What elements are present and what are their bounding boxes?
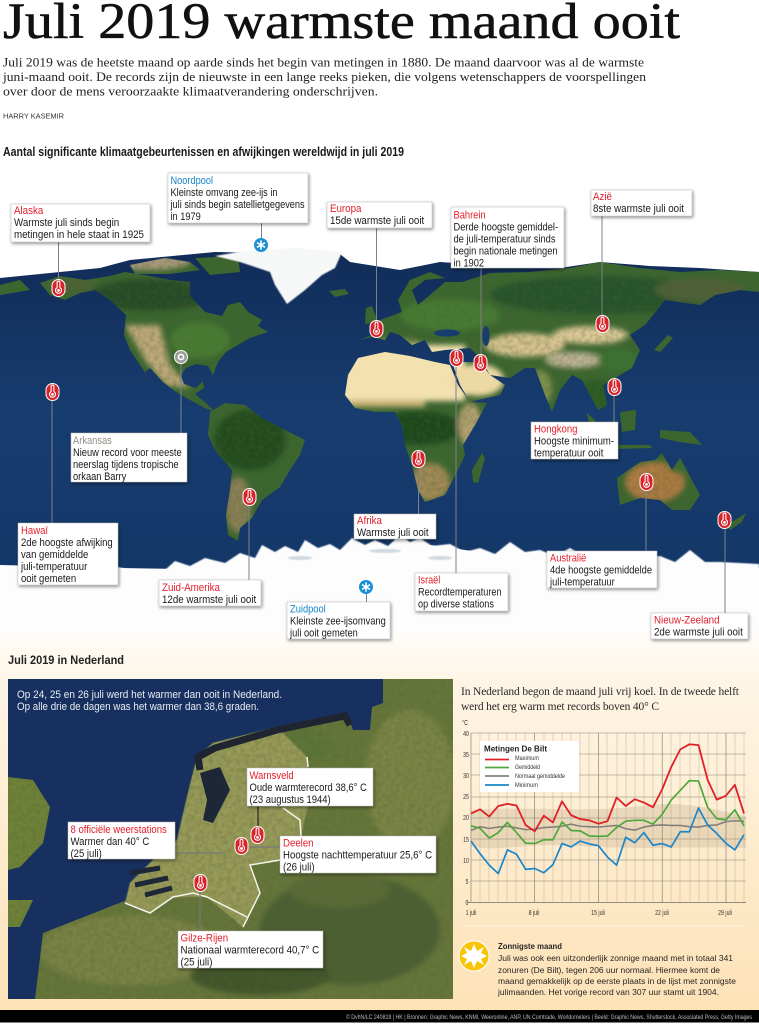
callout: Alaska: Alaska — [14, 206, 44, 217]
map intro text — [17, 689, 282, 713]
callout: Europa: 15de warmste juli ooit — [330, 216, 424, 227]
callout: Warnsveld: Warnsveld — [250, 771, 294, 782]
chart intro text: werd het erg warm met records boven 40° C — [461, 701, 659, 713]
callout: Israël: Recordtemperaturen — [418, 587, 502, 599]
connector lines: grey — [175, 847, 280, 931]
x axis labels: 22 juli — [655, 909, 669, 917]
y axis labels: 30 — [463, 772, 469, 780]
greenland ice — [215, 248, 342, 304]
callout: Gilze-Rijen — [178, 931, 323, 969]
callout: Gilze-Rijen: (25 juli) — [180, 957, 212, 969]
callout: Nieuw-Zeeland — [651, 613, 748, 639]
callout: 8 officiële weerstations: (25 juli) — [70, 849, 102, 860]
callout: Noordpool: Noordpool — [170, 175, 213, 187]
callout: Europa: Europa — [330, 204, 362, 215]
land: England — [8, 777, 50, 927]
callout: Afrika: Afrika — [357, 516, 382, 527]
heading: Nederland: Juli 2019 in Nederland — [8, 655, 124, 667]
callout: Zuidpool — [287, 602, 390, 640]
x axis labels: 8 juli — [529, 909, 539, 917]
map intro text: Op 24, 25 en 26 juli werd het warmer dan ooit in Nederland. — [17, 689, 282, 701]
callout: Hongkong — [531, 422, 618, 460]
callout: Deelen: Hoogste nachttemperatuur 25,6° C — [283, 850, 432, 862]
x axis labels: 1 juli — [466, 909, 476, 917]
y axis labels: 5 — [466, 878, 469, 886]
callout: 8 officiële weerstations: Warmer dan 40° C — [70, 837, 149, 848]
callout: Warnsveld: (23 augustus 1944) — [250, 795, 331, 806]
y axis labels: 35 — [463, 751, 469, 759]
callout: Israël: op diverse stations — [418, 599, 494, 611]
intro text — [2, 54, 647, 98]
callout: Azië — [591, 190, 692, 216]
callout: Australië — [547, 551, 657, 589]
callout: Nieuw-Zeeland: 2de warmste juli ooit — [654, 627, 743, 639]
y axis labels: 10 — [463, 857, 469, 865]
callout: Warnsveld — [247, 768, 373, 806]
callout: Afrika: Warmste juli ooit — [357, 528, 429, 539]
callout: Noordpool — [168, 173, 308, 223]
callout: Hongkong: Hongkong — [534, 424, 577, 436]
heading: world map: Aantal significante klimaatgebeurtenissen en afwijkingen wereldwijd in juli 2019 — [3, 145, 404, 159]
callout: Zuid-Amerika: Zuid-Amerika — [162, 583, 220, 594]
callout: Hawaï: ooit gemeten — [21, 574, 76, 585]
icon: snowflake Noordpool — [254, 238, 268, 252]
markers: Nederland — [194, 826, 264, 892]
chart legend: Minimum — [515, 782, 538, 789]
callout: Deelen: Deelen — [283, 838, 314, 850]
callout: Israël — [415, 573, 508, 611]
chart intro text: In Nederland begon de maand juli vrij koel. In de tweede helft — [461, 686, 740, 698]
intro text: juni-maand ooit. De records zijn de nieuwste in een lange reeks pieken, die volgens wetenschappers de voorspellingen — [2, 69, 647, 84]
chart legend: Normaal gemiddelde — [515, 773, 565, 780]
map intro text: Op alle drie de dagen was het warmer dan 38,6 graden. — [17, 701, 259, 713]
callout: Bahrein: in 1902 — [454, 258, 484, 270]
icon: hurricane Arkansas — [174, 350, 188, 364]
callout: Hawaï: Hawaï — [21, 526, 48, 537]
callout: Noordpool: juli sinds begin satellietgegevens — [170, 199, 305, 211]
callout: Bahrein — [451, 207, 564, 270]
Nederland satellite map — [8, 679, 455, 999]
callout: Bahrein: de juli-temperatuur sinds — [454, 234, 555, 246]
border line — [125, 757, 308, 927]
callout: Zuid-Amerika — [159, 580, 261, 606]
connector lines: Nederland — [257, 806, 259, 830]
terrain texture — [8, 679, 453, 999]
sunny month text: maand gemakkelijk op de eerste plaats in de lijst met zonnigste — [498, 976, 736, 986]
chart intro text — [461, 686, 740, 713]
callout: Warnsveld: Oude warmterecord 38,6° C — [250, 783, 367, 794]
callout: Arkansas: neerslag tijdens tropische — [73, 460, 179, 471]
callout: Noordpool: in 1979 — [170, 211, 201, 223]
sunny month text: julimaanden. Het vorige record van 307 uur stamt uit 1904. — [497, 987, 719, 997]
callout: Alaska: metingen in hele staat in 1925 — [14, 230, 144, 241]
callout: Australië: juli-temperatuur — [549, 577, 615, 589]
normal band — [471, 804, 746, 848]
icon: snowflake Zuidpool — [359, 580, 373, 594]
x axis labels: 15 juli — [591, 909, 605, 917]
callout: Bahrein: Derde hoogste gemiddel- — [454, 222, 558, 234]
callout: Hongkong: temperatuur ooit — [534, 448, 604, 460]
connector lines: world map — [52, 216, 725, 613]
callout: Bahrein: begin nationale metingen — [454, 246, 558, 258]
y axis labels: 40 — [463, 730, 469, 738]
callout: Hawaï: van gemiddelde — [21, 550, 89, 561]
sunny month text: Zonnigste maand — [498, 941, 562, 951]
callout: Australië: 4de hoogste gemiddelde — [550, 565, 652, 577]
callout: Australië: Australië — [550, 553, 587, 565]
sunny month text: zonuren (De Bilt), tegen 206 uur normaal. Hiermee komt de — [498, 965, 720, 975]
intro text: over door de mens veroorzaakte klimaatverandering onderschrijven. — [3, 84, 378, 98]
land: Europe mainland — [35, 679, 453, 999]
chart legend: Gemiddeld — [515, 764, 540, 771]
y axis labels: °C — [462, 719, 468, 727]
y axis labels: 0 — [466, 899, 469, 907]
water: Wadden and IJsselmeer — [198, 716, 350, 770]
callout: Nieuw-Zeeland: Nieuw-Zeeland — [654, 615, 720, 627]
y axis labels — [462, 719, 469, 907]
y axis labels: 25 — [463, 793, 469, 801]
callout: 8 officiële weerstations — [68, 822, 175, 860]
callout: Gilze-Rijen: Nationaal warmterecord 40,7° C — [180, 945, 319, 957]
callout: Hawaï — [18, 523, 118, 585]
byline: HARRY KASEMIR — [3, 112, 64, 120]
callout: Arkansas — [71, 433, 187, 483]
callout: Arkansas: Arkansas — [73, 436, 112, 447]
callout: Noordpool: Kleinste omvang zee-ijs in — [170, 187, 277, 199]
line chart: Metingen De Bilt — [462, 719, 746, 917]
y axis labels: 15 — [463, 836, 469, 844]
callout: Zuid-Amerika: 12de warmste juli ooit — [162, 595, 256, 606]
y axis labels: 20 — [463, 814, 469, 822]
intro text: Juli 2019 was de heetste maand op aarde sinds het begin van metingen in 1880. De maand daarvoor was al de warmste — [3, 54, 644, 70]
callout: Hawaï: 2de hoogste afwijking — [21, 538, 113, 549]
callout: Zuidpool: Zuidpool — [290, 604, 326, 616]
world map — [0, 248, 759, 569]
chart legend: Metingen De Bilt — [484, 744, 547, 754]
sunny month text — [497, 941, 736, 997]
chart legend: Maximum — [515, 755, 539, 762]
callout: Bahrein: Bahrein — [454, 210, 486, 222]
x axis labels — [466, 909, 732, 917]
chart legend — [480, 741, 579, 792]
callout: Hongkong: Hoogste minimum- — [534, 436, 614, 448]
callout: Azië: 8ste warmste juli ooit — [593, 204, 684, 215]
callout: Arkansas: orkaan Barry — [73, 472, 126, 483]
land: Netherlands — [125, 727, 308, 927]
callout: Europa — [327, 202, 432, 228]
callout: Alaska: Warmste juli sinds begin — [14, 218, 119, 229]
callout: Arkansas: Nieuw record voor meeste — [73, 448, 182, 459]
callout: Zuidpool: juli ooit gemeten — [289, 628, 358, 640]
markers: world map — [46, 280, 731, 528]
callout: Alaska — [11, 204, 150, 242]
icon: sun — [459, 941, 489, 971]
x axis labels: 29 juli — [718, 909, 732, 917]
callout: Hawaï: juli-temperatuur — [20, 562, 88, 573]
callout: Deelen — [280, 836, 436, 874]
callout: Deelen: (26 juli) — [283, 862, 315, 874]
callout: 8 officiële weerstations: 8 officiële weerstations — [70, 825, 167, 836]
callout: Israël: Israël — [418, 575, 440, 587]
callout: Zuidpool: Kleinste zee-ijsomvang — [290, 616, 386, 628]
callout: Azië: Azië — [593, 192, 612, 203]
inland seas — [434, 326, 490, 346]
page background — [0, 540, 759, 1010]
footer bar — [0, 1010, 759, 1022]
antarctic ice — [0, 535, 759, 630]
callout: Gilze-Rijen: Gilze-Rijen — [180, 933, 228, 945]
callout: Afrika — [354, 514, 436, 539]
sunny month text: Juli was ook een uitzonderlijk zonnige maand met in totaal 341 — [498, 953, 733, 963]
